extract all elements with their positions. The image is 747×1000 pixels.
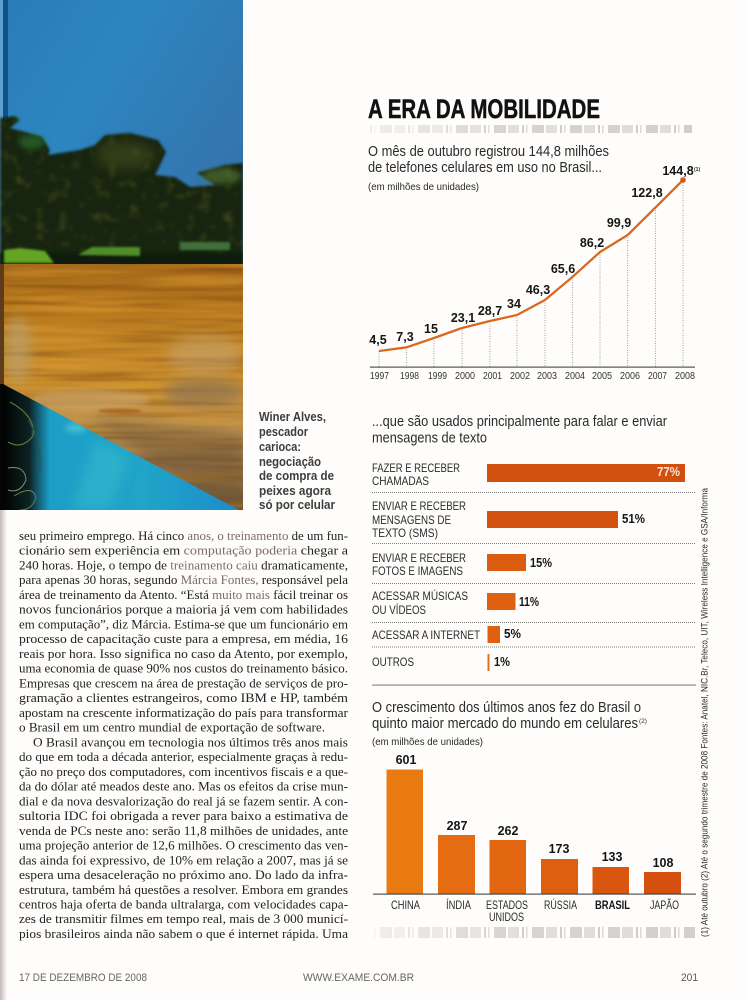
- year labels: 2003: [537, 371, 557, 382]
- article body text: zes de transmitir filmes em tempo real, mais de 3 000 municí-: [19, 911, 348, 926]
- photo caption: peixes agora: [259, 484, 332, 498]
- year labels: 2002: [510, 371, 530, 382]
- row: photos: ENVIAR E RECEBER: [372, 551, 466, 565]
- value labels: 23,1: [451, 311, 475, 325]
- country labels: RÚSSIA: [544, 897, 577, 912]
- article body text: para apenas 30 horas, segundo Márcia Fontes, responsável pela: [19, 572, 348, 587]
- values: 601: [396, 753, 416, 767]
- title: A ERA DA MOBILIDADE: [368, 94, 600, 124]
- row: sms: ENVIAR E RECEBER: [372, 499, 466, 513]
- photo caption: só por celular: [259, 498, 335, 512]
- country labels: [391, 897, 679, 924]
- article body text: seu primeiro emprego. Há cinco anos, o treinamento de um fun-: [19, 528, 348, 543]
- decorative header strip: [368, 125, 692, 133]
- article body text: dial e da nova desvalorização do real já se fazem sentir. A con-: [19, 793, 348, 808]
- page gutter shadow: [0, 510, 7, 1000]
- article body text: novos funcionários porque a maioria já vem com habilidades: [19, 602, 348, 617]
- value labels: (1): [694, 167, 700, 173]
- article body text: venda de PCs neste ano: serão 11,8 milhões de unidades, ante: [19, 823, 348, 838]
- usage chart heading: mensagens de texto: [372, 430, 487, 446]
- market chart heading: O crescimento dos últimos anos fez do Brasil o: [372, 699, 641, 716]
- bars: [386, 770, 681, 894]
- article body text: o Brasil em um centro mundial de exportação de software.: [19, 720, 325, 735]
- row: calls: 77%: [657, 465, 680, 479]
- row: calls: [372, 461, 685, 488]
- year labels: 2008: [675, 371, 695, 382]
- row: photos: FOTOS E IMAGENS: [372, 564, 463, 578]
- bar chart: largest mobile markets: [373, 753, 696, 924]
- market chart heading: (2): [639, 719, 647, 725]
- article body text: Empresas que crescem na área de prestação de serviços de pro-: [19, 675, 348, 690]
- drop lines: [379, 180, 683, 367]
- market chart heading: [372, 699, 647, 732]
- article body text: uma economia de quase 90% nos custos do treinamento básico.: [19, 661, 348, 676]
- row: sms: 51%: [622, 512, 645, 526]
- article body text: do que em toda a década anterior, especialmente graças à redu-: [19, 749, 348, 764]
- row: sms: MENSAGENS DE: [372, 513, 451, 527]
- year labels: 2006: [620, 371, 640, 382]
- value labels: [369, 164, 700, 347]
- row: sms: TEXTO (SMS): [372, 526, 438, 540]
- usage chart heading: [372, 413, 667, 446]
- axis: [373, 894, 696, 895]
- year labels: 1999: [428, 371, 447, 382]
- value labels: 15: [424, 322, 438, 336]
- row: internet: ACESSAR A INTERNET: [372, 628, 481, 642]
- article body text: reais por hora. Isso significa no caso da Atento, por exemplo,: [19, 646, 348, 661]
- row: calls: FAZER E RECEBER: [372, 461, 460, 475]
- line chart heading: O mês de outubro registrou 144,8 milhões: [368, 143, 609, 160]
- article body text: pios brasileiros ainda não sabem o que é internet rápida. Uma: [19, 926, 348, 941]
- usage chart heading: ...que são usados principalmente para falar e enviar: [372, 413, 667, 430]
- value labels: 99,9: [607, 216, 631, 230]
- photo caption: de compra de: [259, 469, 334, 483]
- row: music: [372, 588, 539, 617]
- row: photos: [372, 551, 552, 578]
- row: others: [372, 654, 510, 671]
- article body text: sultoria IDC foi obrigada a rever para baixo a estimativa de: [19, 808, 348, 823]
- photo caption: [259, 410, 335, 512]
- row: music: OU VÍDEOS: [372, 602, 426, 617]
- row: others: 1%: [494, 655, 510, 669]
- article body text: uma projeção anterior de 12,6 milhões. O crescimento das ven-: [19, 838, 348, 852]
- footer date: 17 DE DEZEMBRO DE 2008: [19, 972, 147, 984]
- line chart: phones in use 1997-2008: [369, 164, 700, 382]
- photo caption: pescador: [259, 425, 308, 439]
- article body text: apostam na crescente informatização do país para transformar: [19, 705, 349, 720]
- year labels: 1998: [400, 371, 419, 382]
- country labels: CHINA: [391, 898, 420, 912]
- footer website: WWW.EXAME.COM.BR: [303, 972, 414, 984]
- axis: [370, 367, 695, 368]
- value labels: 65,6: [551, 262, 575, 276]
- value labels: 122,8: [631, 186, 663, 200]
- row: music: 11%: [519, 595, 539, 609]
- value labels: 144,8: [662, 164, 694, 178]
- data line: [379, 180, 683, 351]
- row: calls: CHAMADAS: [372, 474, 429, 488]
- article body text: ção no preço dos computadores, com incentivos fiscais e a que-: [19, 764, 348, 779]
- line chart unit note: (em milhões de unidades): [368, 181, 479, 193]
- article body text: gramação a clientes estrangeiros, como IBM e HP, também: [19, 690, 348, 705]
- article body text: área de treinamento da Atento. “Está muito mais fácil treinar os: [19, 587, 348, 602]
- value labels: 34: [507, 297, 521, 311]
- row: music: ACESSAR MÚSICAS: [372, 588, 468, 603]
- article body text: [19, 528, 349, 941]
- line chart heading: de telefones celulares em uso no Brasil...: [368, 159, 602, 176]
- decorative bottom strip: [372, 927, 695, 938]
- value labels: 7,3: [396, 330, 414, 344]
- line chart heading: [368, 143, 609, 176]
- article body text: das ainda foi expressivo, de 10% em relação a 2007, mas já se: [19, 852, 348, 867]
- end marker: [680, 177, 686, 183]
- article body text: O Brasil avançou em tecnologia nos últimos três anos mais: [33, 734, 348, 749]
- article body text: espera uma desaceleração no próximo ano. Do lado da infra-: [19, 867, 348, 882]
- photo caption: carioca:: [259, 440, 301, 454]
- row: others: OUTROS: [372, 655, 414, 669]
- country labels: BRASIL: [595, 898, 630, 912]
- page number: 201: [681, 972, 698, 984]
- value labels: 86,2: [580, 236, 604, 250]
- photo caption: negociação: [259, 455, 321, 469]
- market chart unit note: (em milhões de unidades): [372, 736, 483, 748]
- article body text: em computação”, diz Márcia. Estima-se que um funcionário em: [19, 616, 348, 631]
- values: 262: [498, 824, 518, 838]
- country labels: UNIDOS: [489, 910, 524, 924]
- article body text: estrutura, também há questões a resolver. Embora em grandes: [19, 882, 348, 897]
- country labels: ÍNDIA: [446, 897, 471, 912]
- values: 173: [549, 842, 569, 856]
- year labels: 2000: [455, 371, 475, 382]
- article body text: cionário sem experiência em computação poderia chegar a: [19, 543, 348, 558]
- vertical source note: (1) Até outubro (2) Até o segundo trimestre de 2008 Fontes: Anatel, NIC.Br, Teleco, UIT, Wireless Intelligence e GSA/Informa: [700, 487, 710, 937]
- bar chart: phone uses: [372, 461, 685, 671]
- value labels: 4,5: [369, 333, 387, 347]
- values: 108: [653, 856, 673, 870]
- boat bow: [3, 384, 239, 510]
- value labels: 28,7: [478, 304, 502, 318]
- article body text: processo de capacitação custe para a empresa, em média, 16: [19, 631, 349, 646]
- article body text: centros haja oferta de banda ultralarga, com velocidades capa-: [19, 896, 348, 912]
- year labels: [370, 371, 695, 382]
- market chart heading: quinto maior mercado do mundo em celulares: [372, 715, 638, 732]
- values: 287: [447, 819, 467, 833]
- row: internet: 5%: [504, 627, 521, 641]
- photo caption: Winer Alves,: [259, 410, 326, 424]
- photo: river with boat bow: [0, 0, 247, 510]
- values: [396, 753, 673, 870]
- article body text: da do dólar até meados deste ano. Mas os efeitos da crise mun-: [19, 779, 348, 794]
- row: photos: 15%: [530, 556, 552, 570]
- year labels: 1997: [370, 371, 389, 382]
- year labels: 2001: [483, 371, 502, 382]
- values: 133: [602, 850, 622, 864]
- year labels: 2004: [565, 371, 585, 382]
- article body text: 240 horas. Hoje, o tempo de treinamento caiu dramaticamente,: [19, 558, 348, 572]
- value labels: 46,3: [526, 283, 550, 297]
- row: sms: [372, 499, 645, 540]
- year labels: 2005: [592, 371, 612, 382]
- year labels: 2007: [648, 371, 667, 382]
- country labels: ESTADOS: [486, 898, 528, 912]
- country labels: JAPÃO: [650, 898, 679, 912]
